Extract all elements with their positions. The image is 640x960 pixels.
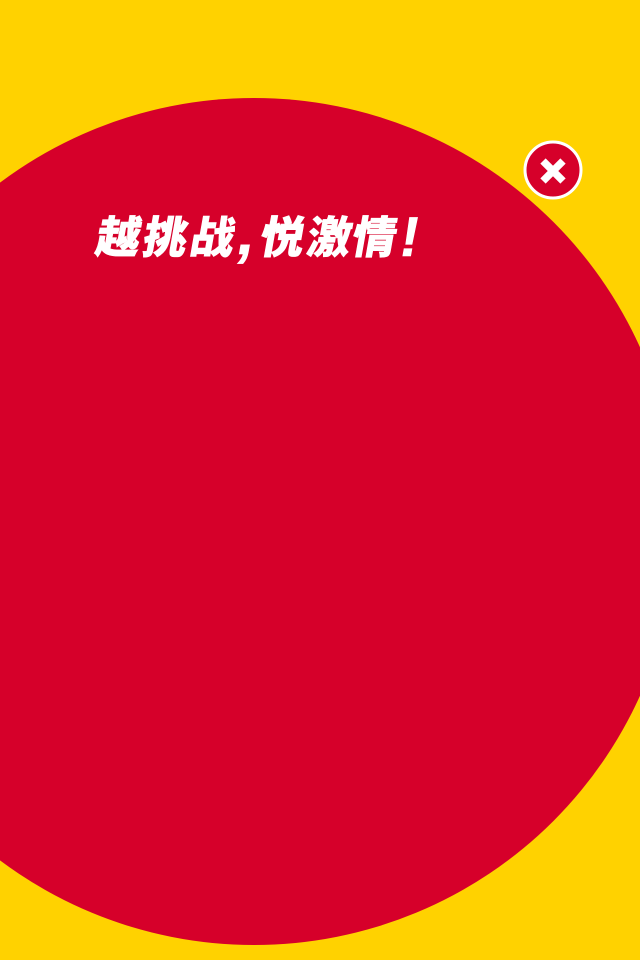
heading: 战 xyxy=(186,214,239,263)
heading: 悦 xyxy=(256,214,309,263)
heading: 激 xyxy=(303,214,356,263)
heading: , xyxy=(232,198,262,268)
close button icon xyxy=(525,142,581,198)
heading: ! xyxy=(395,205,425,268)
heading: 情 xyxy=(348,214,401,263)
heading xyxy=(91,198,426,268)
heading: 挑 xyxy=(139,214,192,263)
heading: 越 xyxy=(92,214,145,263)
